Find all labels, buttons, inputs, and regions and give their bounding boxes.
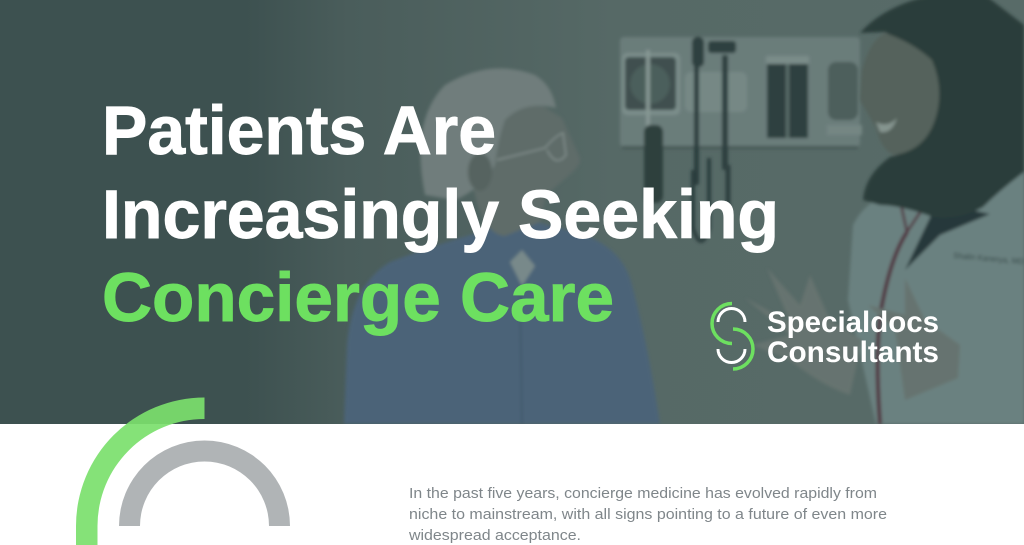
patient shirt bbox=[344, 218, 660, 424]
intro paragraph: widespread acceptance. bbox=[408, 527, 581, 544]
patient hair bbox=[420, 68, 556, 200]
logo wordmark bbox=[767, 306, 939, 369]
doctor left hand bbox=[755, 274, 862, 394]
intro paragraph: In the past five years, concierge medicine has evolved rapidly from bbox=[409, 485, 877, 502]
intro paragraph: niche to mainstream, with all signs pointing to a future of even more bbox=[409, 506, 887, 523]
title line 1: Patients Are bbox=[102, 92, 496, 169]
patient glasses bbox=[497, 133, 566, 160]
patient neck and face bbox=[474, 106, 578, 236]
doctor figure bbox=[745, 0, 1024, 424]
doctor hair bbox=[860, 0, 1024, 218]
title line 3 highlighted: Concierge Care bbox=[102, 259, 614, 336]
Specialdocs Consultants logo bbox=[712, 304, 939, 369]
logo wordmark: Specialdocs bbox=[767, 306, 939, 339]
wall-mounted diagnostic panel bbox=[620, 37, 862, 241]
logo S mark bbox=[712, 304, 753, 369]
doctor right hand bbox=[868, 278, 960, 400]
intro paragraph bbox=[408, 485, 887, 544]
decorative green arc bbox=[76, 398, 204, 545]
logo wordmark: Consultants bbox=[767, 336, 939, 369]
doctor white coat bbox=[848, 165, 1024, 424]
doctor name text on coat: Shalin Kanerya, MD bbox=[953, 251, 1024, 266]
white lower section bbox=[0, 424, 1024, 545]
doctor face bbox=[860, 33, 939, 155]
title line 2: Increasingly Seeking bbox=[102, 176, 779, 253]
doctor stethoscope bbox=[878, 232, 907, 424]
decorative grey arc bbox=[119, 441, 290, 526]
hero photo panel bbox=[0, 0, 1024, 424]
patient figure bbox=[344, 68, 660, 424]
title bbox=[102, 92, 779, 336]
